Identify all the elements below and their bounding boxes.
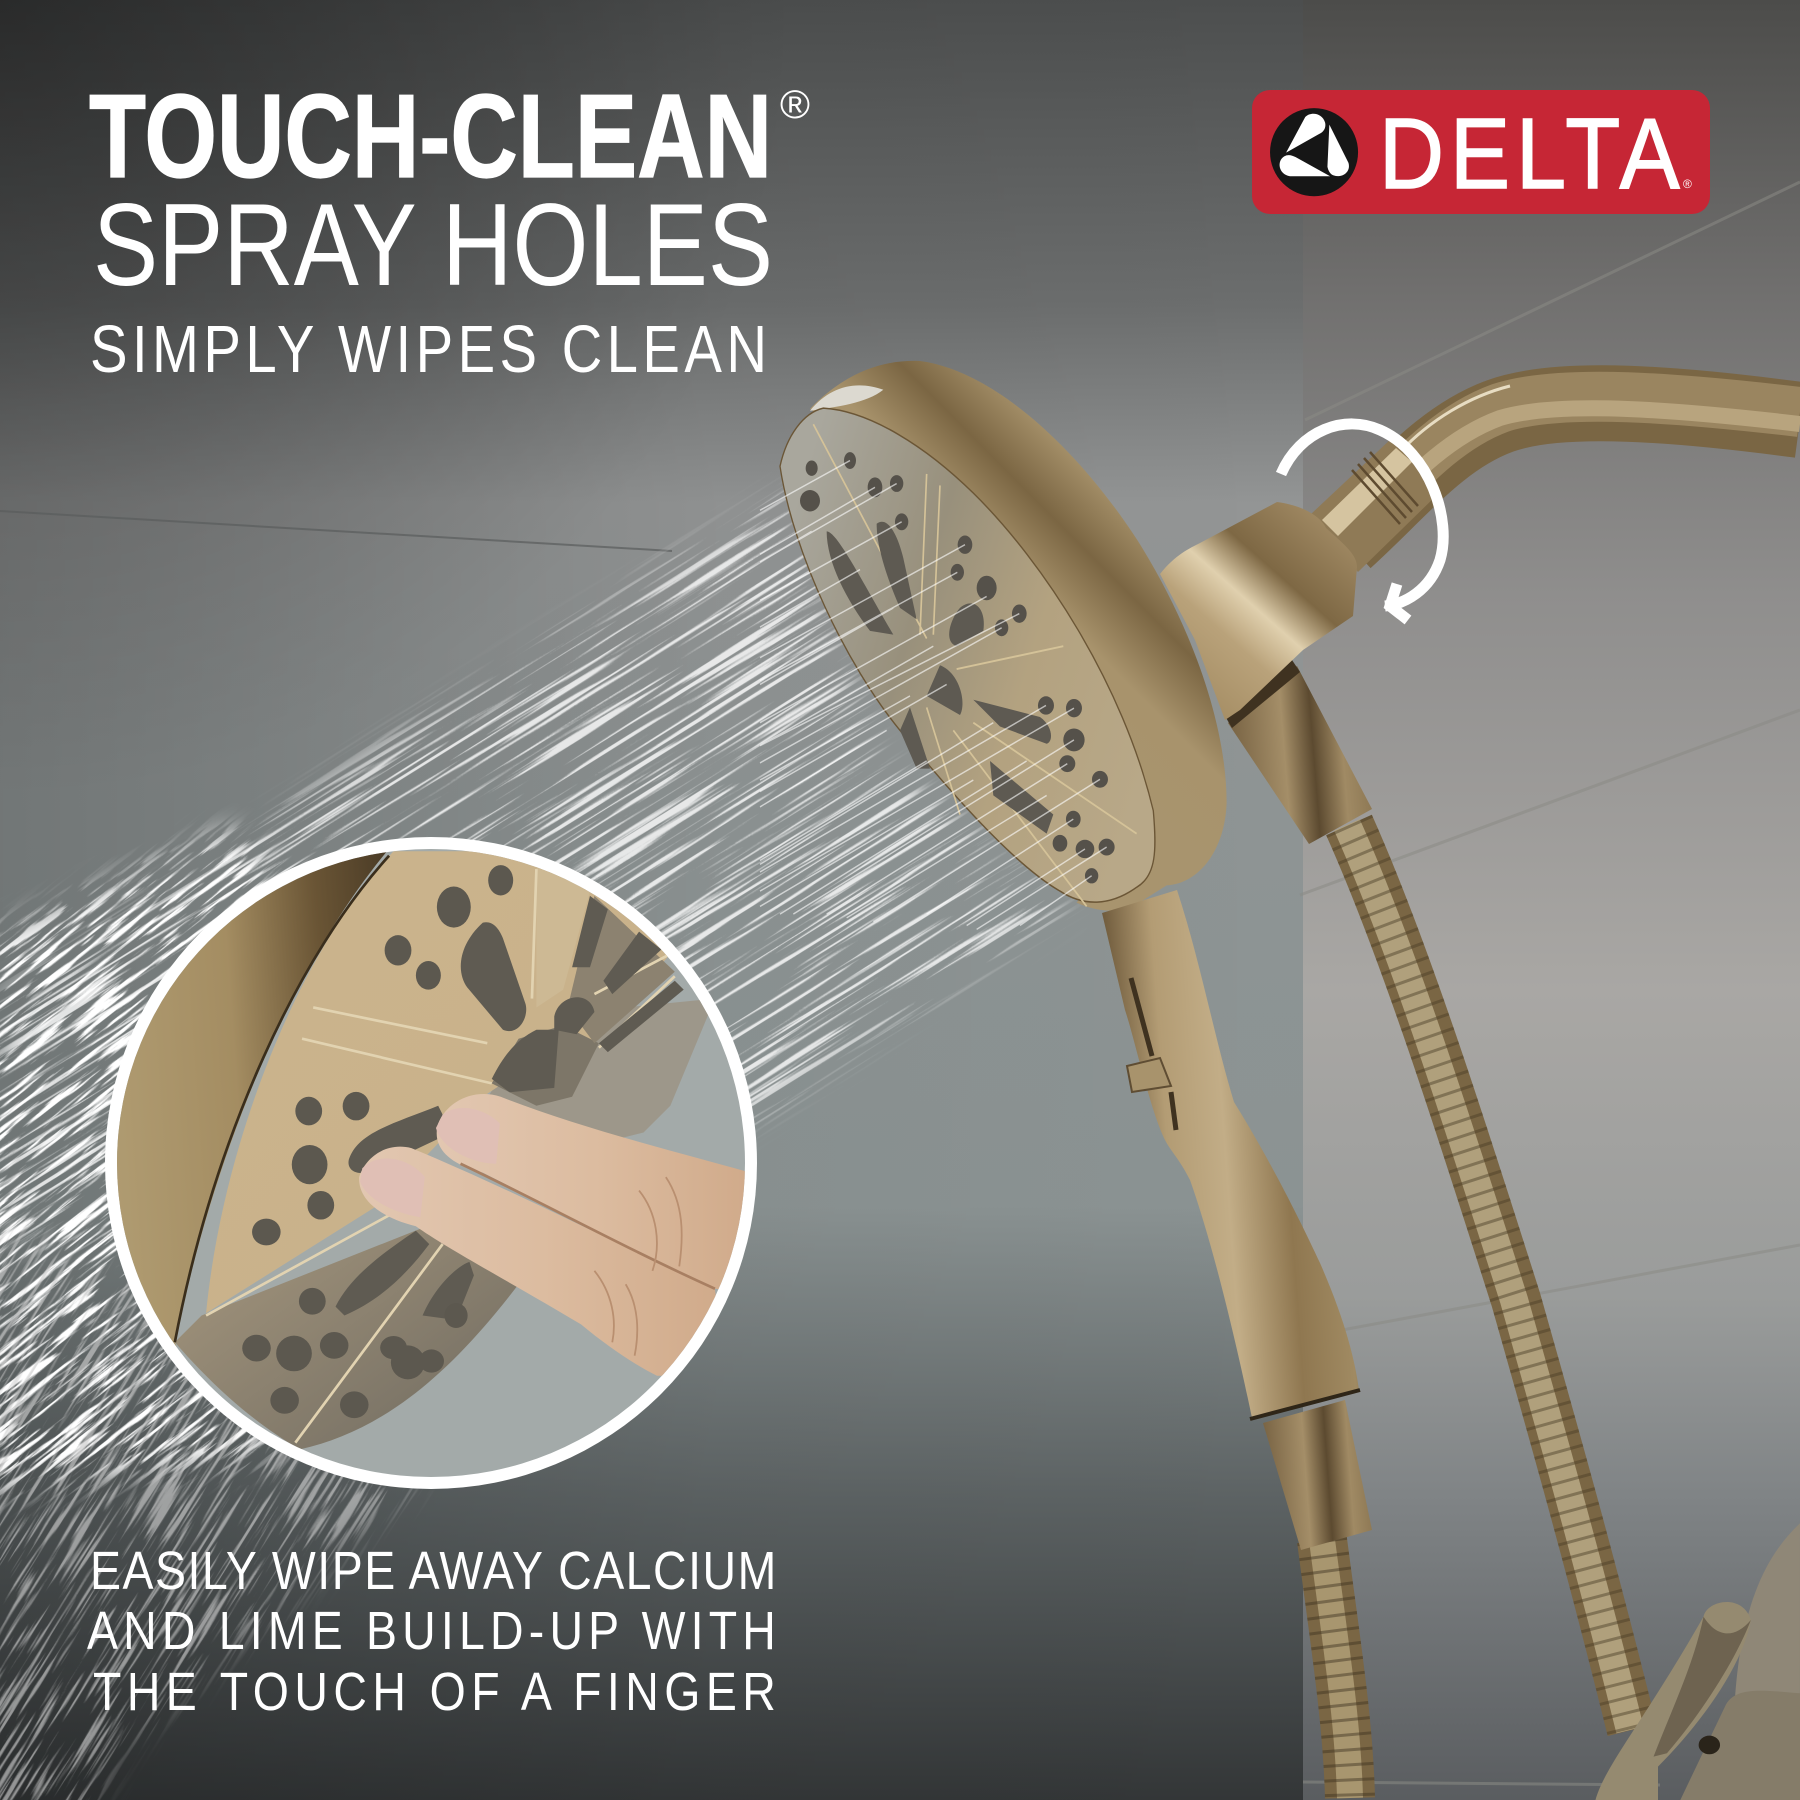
valve hub [1680,1691,1800,1800]
swivel mount [1160,502,1357,720]
petals [827,522,1053,834]
lower finger [359,1147,724,1376]
lever [1596,1602,1751,1800]
logo registered mark: ® [1683,177,1692,191]
face ribs [813,424,1137,906]
rotation arrow [1281,424,1443,620]
rim line [175,856,389,1342]
shower head [760,361,1227,929]
water jets from holes [760,461,1107,929]
finger shadow [461,1164,715,1289]
face [206,851,670,1313]
title: TOUCH-CLEAN: TOUCH-CLEAN [89,70,772,203]
bottom caption: EASILY WIPE AWAY CALCIUM [90,1540,776,1601]
valve and lever [1596,1523,1800,1800]
Delta logo badge [1252,90,1710,214]
logo mark [1270,108,1358,196]
lower nail [360,1158,425,1217]
petals [336,896,684,1320]
nickel reflection [490,1000,708,1138]
handle [1102,890,1359,1418]
hose connector [1225,660,1372,844]
bottom caption: THE TOUCH OF A FINGER [93,1661,776,1722]
water spray [0,490,1075,1800]
spray nozzles [242,865,513,1418]
spray face [780,408,1155,902]
head highlight [810,385,883,411]
upper nail [436,1108,500,1164]
center hub [492,1025,599,1106]
lower face [175,1229,516,1449]
valve hole [1699,1736,1720,1754]
valve plate [1734,1523,1800,1800]
wordmark: DELTA [1379,99,1680,210]
heading: SPRAY HOLES: SPRAY HOLES [93,179,773,310]
spray holes [800,452,1115,883]
top right wedges [536,865,590,1007]
switch slot [1131,978,1176,1130]
hose below handle [1322,1540,1350,1798]
handle collar [1250,1390,1372,1550]
shower arm [1345,386,1800,540]
threaded neck [1310,438,1440,572]
ribs [206,869,675,1443]
hose to valve [1347,825,1632,1730]
head body [810,361,1227,911]
knuckle creases [594,1177,682,1356]
upper finger [437,1094,751,1293]
inset circle: finger wiping spray holes [103,833,757,1489]
subheading: SIMPLY WIPES CLEAN [90,312,767,387]
bottom caption: AND LIME BUILD-UP WITH [87,1600,776,1661]
registered mark: ® [780,83,810,127]
head rim crescent [117,852,386,1348]
switch button [1127,1058,1171,1092]
bottom caption [87,1540,776,1722]
